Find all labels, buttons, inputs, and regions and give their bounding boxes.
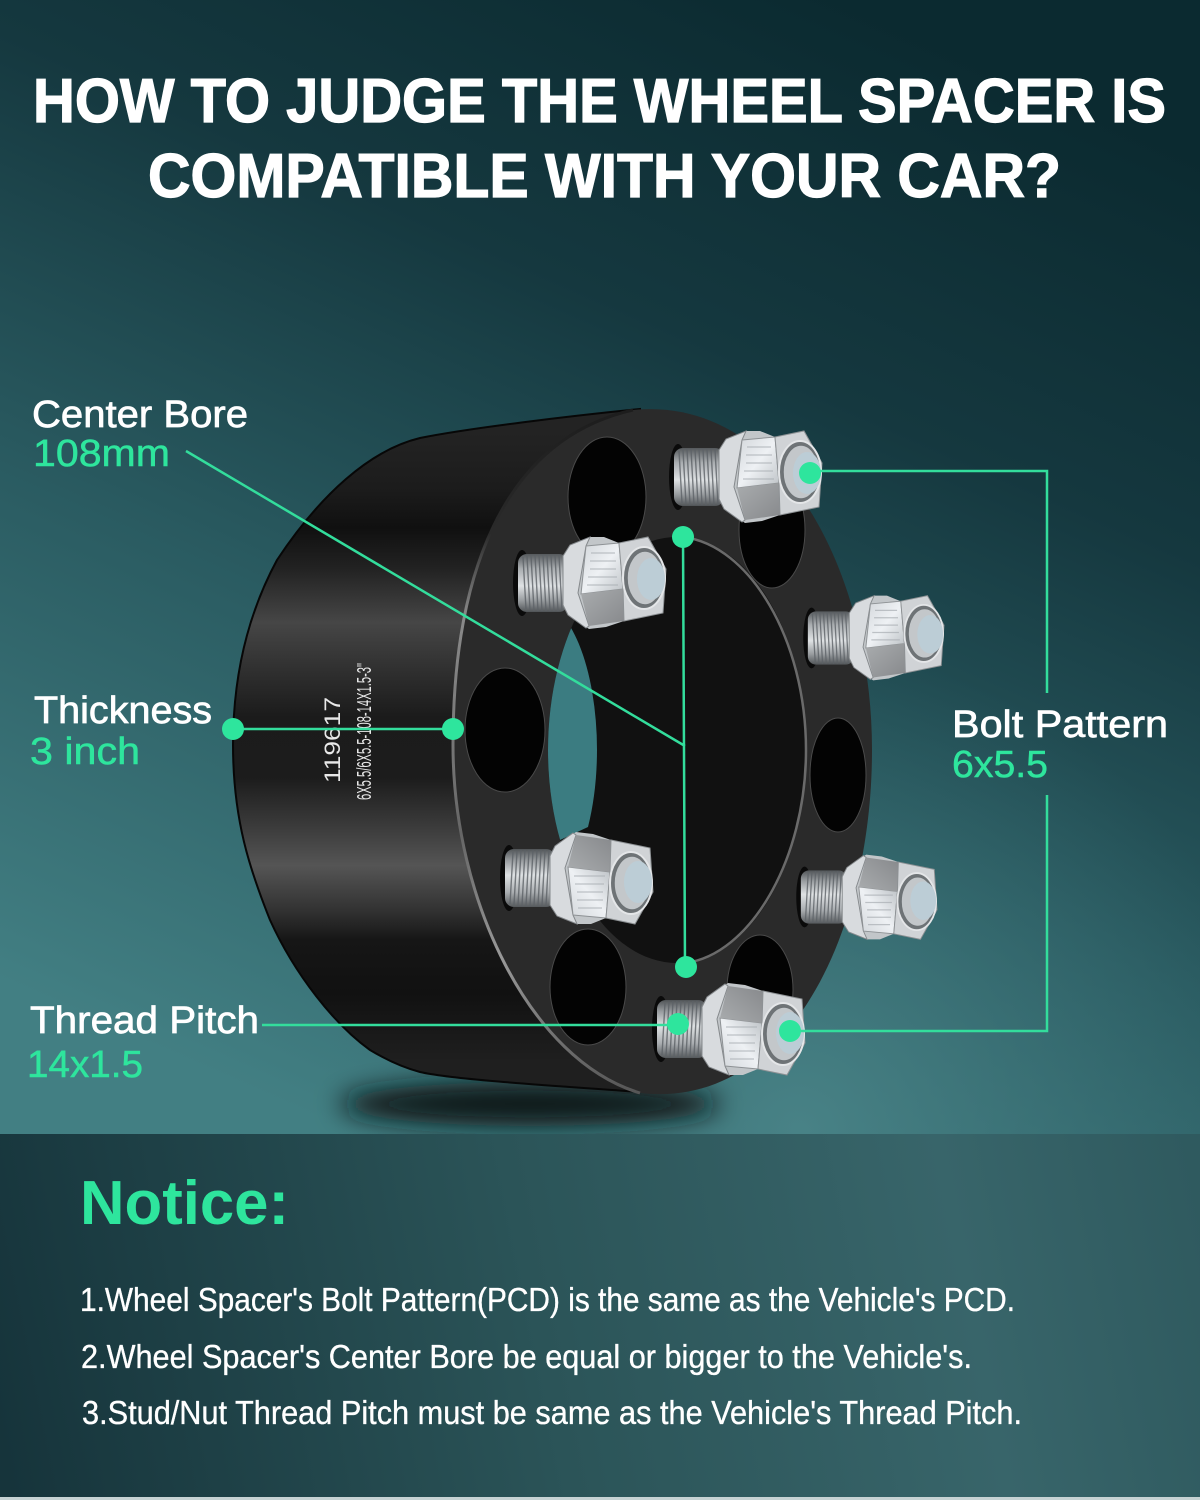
- label: center bore: [32, 394, 248, 475]
- callout lines: [186, 451, 1047, 1031]
- label: thread pitch: Thread Pitch: [30, 1000, 259, 1042]
- thickness leader: [233, 728, 453, 730]
- label: bolt pattern: 6x5.5: [952, 744, 1048, 786]
- label: thickness: Thickness: [34, 690, 212, 732]
- wheel spacer illustration: [233, 409, 944, 1094]
- engraved part numbers: 119617: [320, 697, 345, 783]
- center bore leader: [186, 451, 685, 967]
- wheel studs and lug nuts: [500, 431, 944, 1075]
- panel: notice: [0, 1134, 1200, 1500]
- label: bolt pattern: Bolt Pattern: [952, 704, 1168, 746]
- label: thickness: [30, 690, 212, 773]
- label: thread pitch: 14x1.5: [27, 1044, 143, 1086]
- engraved part numbers: [320, 663, 376, 800]
- engraved part numbers: 6X5.5/6X5.5-108-14X1.5-3": [354, 663, 376, 800]
- notice list: [80, 1281, 1022, 1431]
- thread pitch leader: [262, 1024, 678, 1026]
- label: thickness: 3 inch: [30, 731, 140, 773]
- spacer ground shadow: [340, 1082, 720, 1126]
- spacer body: [233, 409, 640, 1092]
- notice list: 1.Wheel Spacer's Bolt Pattern(PCD) is the same as the Vehicle's PCD.: [80, 1281, 1015, 1318]
- label: bolt pattern: [952, 704, 1168, 786]
- bolt pattern bracket: [790, 471, 1047, 1031]
- background: upper section: [0, 0, 1200, 1134]
- notice heading: Notice:: [80, 1169, 289, 1238]
- notice list: 3.Stud/Nut Thread Pitch must be same as the Vehicle's Thread Pitch.: [82, 1394, 1022, 1431]
- label: thread pitch: [27, 1000, 259, 1086]
- title: COMPATIBLE WITH YOUR CAR?: [148, 142, 1061, 211]
- title: [33, 67, 1166, 211]
- center bore: [530, 537, 806, 963]
- label: center bore: 108mm: [33, 433, 170, 475]
- bolt holes: [465, 437, 866, 1045]
- face rim highlight: [453, 410, 640, 1093]
- spacer front face: [453, 409, 872, 1094]
- callout dots: [222, 462, 821, 1042]
- notice list: 2.Wheel Spacer's Center Bore be equal or bigger to the Vehicle's.: [81, 1338, 972, 1375]
- label: center bore: Center Bore: [32, 394, 248, 436]
